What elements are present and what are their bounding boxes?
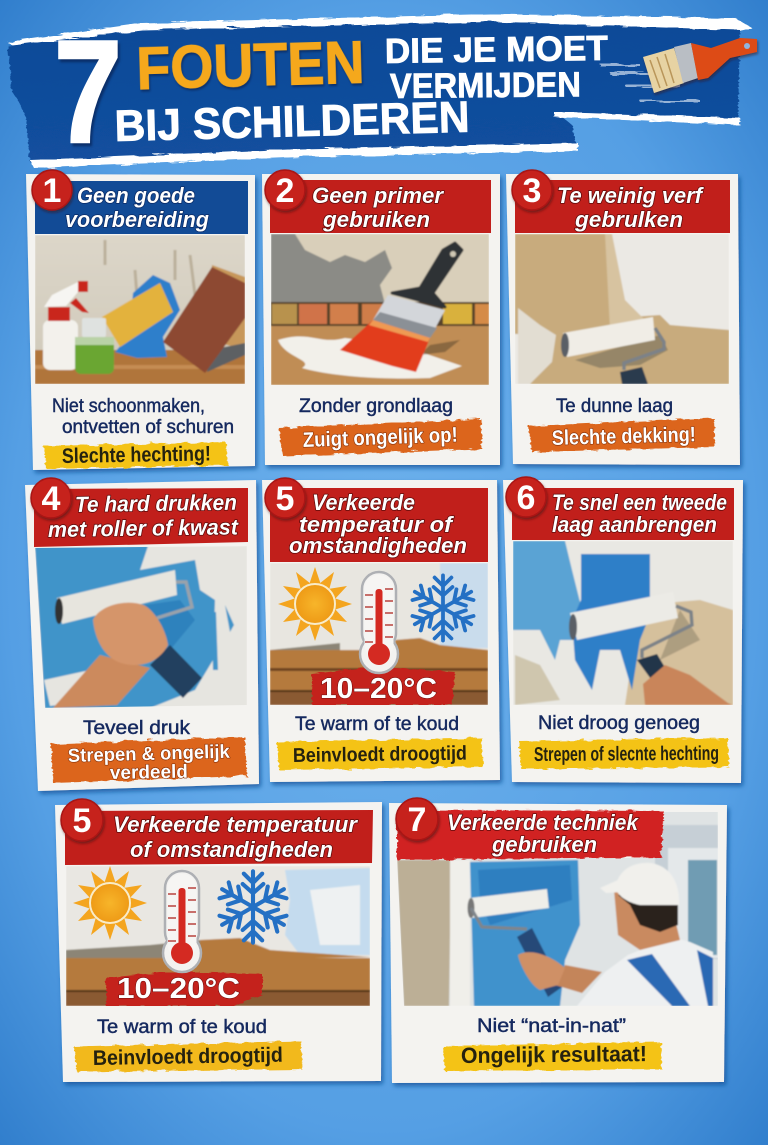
header: verkeerde temperatur of omstandigheden: Verkeerde [312, 490, 415, 515]
icon: sun [73, 866, 147, 940]
card paper [262, 480, 500, 782]
header: verkeerde techniek gebruiken: Verkeerde techniek [447, 810, 640, 835]
result tag: slechte dekking [529, 418, 715, 452]
number badge 4 [31, 478, 71, 518]
header: te snel een tweede laag aanbrengen [512, 488, 734, 540]
number badge 3: 3 [523, 172, 541, 210]
red temperature patch [106, 972, 262, 1006]
card paper [262, 174, 500, 465]
card paper [25, 480, 259, 791]
header: verkeerde temperatuur of omstandigheden [65, 810, 373, 865]
panel: mistake 6 [503, 477, 743, 783]
number badge 1 [32, 170, 72, 210]
result tag: strepen en ongelijk verdeeld: verdeeld [110, 762, 188, 784]
header: verkeerde techniek gebruiken [397, 810, 664, 860]
illustration: painter with roller [397, 810, 718, 1006]
icon: snowflake [410, 575, 476, 641]
card paper [26, 174, 255, 470]
banner brush stroke [7, 14, 752, 168]
title line: vermijden: VERMIJDEN [390, 65, 581, 106]
header: verkeerde temperatur of omstandigheden [270, 488, 488, 562]
icon: sun [278, 567, 352, 641]
illustration: temperature range [66, 866, 370, 1006]
result tag: zuigt ongelijk op: Zuigt ongelijk op! [302, 424, 458, 452]
number badge 6 [506, 477, 546, 517]
result tag: slechte dekking: Slechte dekking! [552, 423, 696, 450]
illustration: second coat too soon [513, 541, 733, 705]
caption: Zonder grondlaag [299, 396, 453, 417]
number badge 5 [265, 478, 305, 518]
caption: Te dunne laag [556, 396, 673, 417]
header: te hard drukken: met roller of kwast [48, 514, 240, 542]
number badge 5: 5 [73, 802, 91, 840]
caption: Niet schoonmaken, [52, 396, 205, 417]
result tag: beinvloedt droogtijd: Beinvloedt droogtijd [293, 743, 467, 767]
header: geen goede voorbereiding: Geen goede [77, 183, 195, 208]
header: verkeerde temperatur of omstandigheden: omstandigheden [289, 533, 467, 558]
number badge 5: 5 [276, 480, 294, 518]
illustration: hand pressing roller [35, 546, 247, 708]
header: te snel een tweede laag aanbrengen: Te snel een tweede [552, 490, 727, 515]
temperature range text: 10–20°C [117, 973, 240, 1005]
number badge 1: 1 [43, 172, 61, 210]
number badge 7 [396, 798, 438, 840]
result tag: ongelijk resultaat: Ongelijk resultaat! [461, 1041, 647, 1068]
illustration: brush on unprimed wall [271, 234, 489, 385]
result tag: strepen en ongelijk verdeeld: Strepen & ongelijk [68, 742, 230, 767]
header: verkeerde temperatuur of omstandigheden: Verkeerde temperatuur [113, 812, 358, 837]
header: te weinig verf gebrulken: Te weinig verf [557, 183, 705, 208]
word FOUTEN: FOUTEN [135, 29, 365, 102]
header: te weinig verf gebrulken [515, 180, 730, 233]
result tag: zuigt ongelijk op [279, 419, 482, 456]
result tag: slechte hechting: Slechte hechting! [62, 442, 211, 468]
result tag: strepen of slechte hechting [519, 738, 729, 769]
card paper [506, 174, 740, 465]
number badge 3 [512, 170, 552, 210]
icon: thermometer [360, 572, 398, 673]
panel: mistake 2 [262, 170, 500, 465]
card paper [503, 480, 743, 783]
header: te weinig verf gebrulken: gebrulken [574, 207, 683, 232]
card paper [389, 803, 727, 1083]
icon: thermometer [163, 871, 201, 972]
caption: Niet droog genoeg [538, 713, 700, 734]
number badge 2: 2 [276, 172, 294, 210]
card paper [55, 802, 382, 1082]
panel: mistake 5 repeated [55, 799, 382, 1082]
icon: paint brush [643, 38, 757, 93]
panel: mistake 4 [25, 478, 259, 791]
caption: Te warm of te koud [295, 714, 459, 735]
panel: mistake 5 [262, 478, 500, 782]
number badge 7: 7 [408, 801, 426, 839]
title line: die je moet: DIE JE MOET [385, 29, 608, 71]
header: geen primer gebruiken: gebruiken [322, 207, 430, 232]
result tag: strepen en ongelijk verdeeld [51, 737, 247, 784]
illustration: temperature range [270, 563, 488, 705]
number badge 5 [61, 799, 103, 841]
caption: ontvetten of schuren [62, 417, 234, 438]
caption: Te warm of te koud [97, 1017, 267, 1038]
header: verkeerde techniek gebruiken: gebruiken [491, 832, 597, 857]
header: verkeerde temperatur of omstandigheden: temperatur of [299, 512, 455, 537]
header: geen primer gebruiken: Geen primer [312, 183, 444, 208]
illustration: cleaning supplies [35, 235, 245, 384]
number badge 4: 4 [42, 480, 61, 518]
red temperature patch [312, 668, 455, 705]
temperature range text: 10–20°C [320, 673, 437, 705]
big number 7: 7 [54, 10, 122, 173]
panel: mistake 7 [389, 798, 727, 1083]
icon: snowflake [217, 871, 289, 943]
header: te hard drukken [34, 488, 248, 547]
caption [52, 396, 234, 438]
caption: Teveel druk [83, 718, 191, 739]
illustration: roller with thin coat [515, 234, 729, 384]
header: geen goede voorbereiding: voorbereiding [65, 207, 210, 232]
number badge 2 [265, 170, 305, 210]
header: verkeerde temperatuur of omstandigheden: of omstandigheden [130, 837, 333, 862]
header: geen goede voorbereiding [35, 181, 248, 234]
panel: mistake 1 [26, 170, 255, 470]
result tag: beinvloedt droogtijd: Beinvloedt droogtijd [93, 1044, 283, 1070]
header: geen primer gebruiken [270, 180, 491, 233]
title line: bij schilderen: BIJ SCHILDEREN [114, 93, 470, 151]
header: te hard drukken: Te hard drukken [75, 490, 237, 517]
caption: Niet “nat-in-nat” [477, 1016, 626, 1037]
number badge 6: 6 [517, 479, 535, 517]
panel: mistake 3 [506, 170, 740, 465]
header: te snel een tweede laag aanbrengen: laag aanbrengen [552, 512, 717, 537]
title banner [7, 10, 757, 173]
